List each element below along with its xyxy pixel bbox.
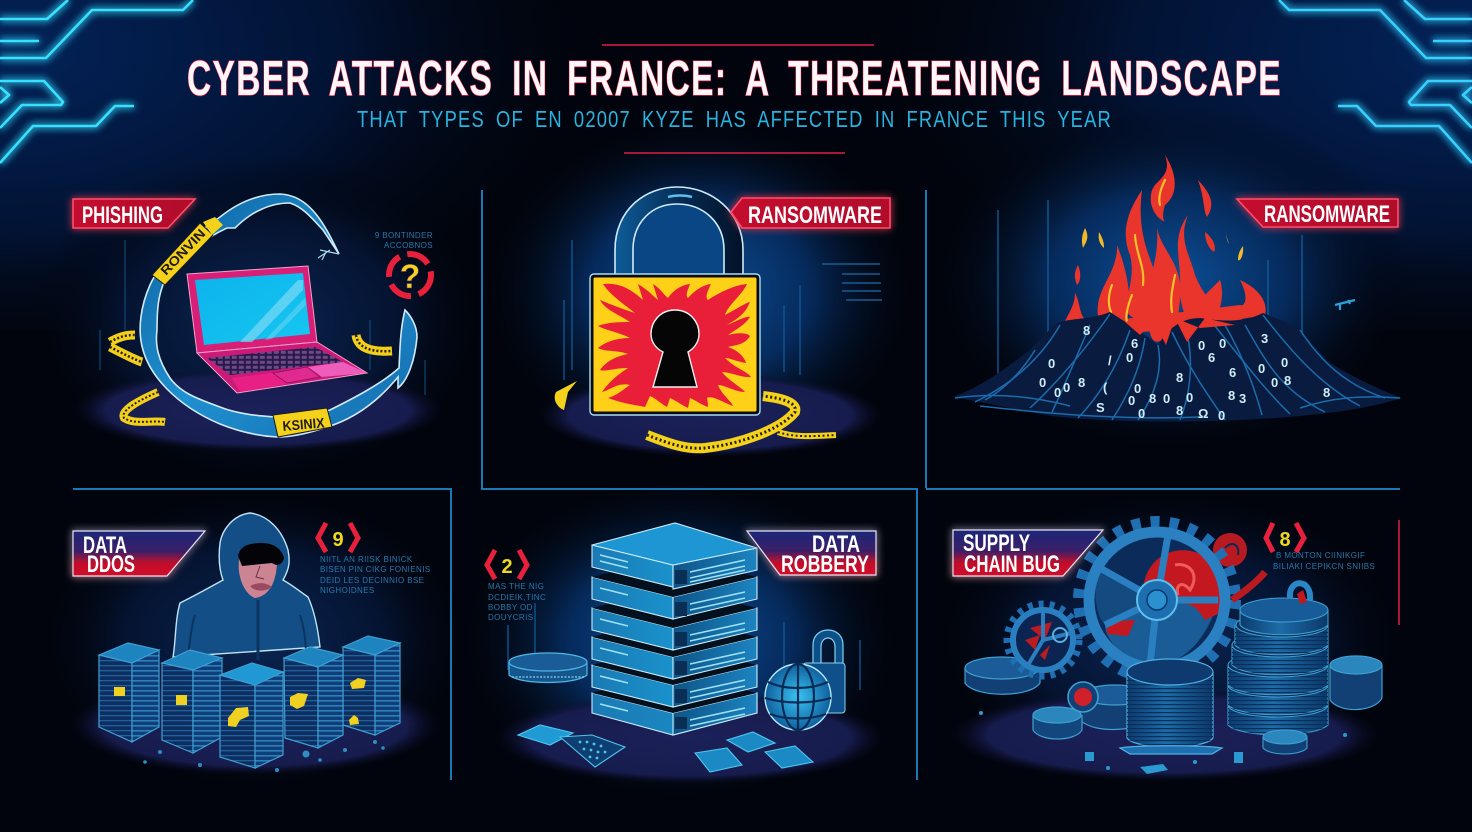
red button [1068,682,1098,712]
binary digits: 3 [1261,331,1268,346]
panel: ransomware fire [953,155,1402,423]
subtitle: THAT TYPES OF EN 02007 KYZE HAS AFFECTED IN FRANCE THIS YEAR [357,106,1112,132]
sparks [1082,228,1243,260]
large gear [1079,522,1235,678]
caption: NIITL AN RIISK BINICK [320,555,413,564]
caption: NIGHOIDNES [320,586,375,595]
binary digits: 0 [1219,336,1226,351]
icon: laptop [187,266,367,393]
icon: keypad and cards [518,725,813,772]
malware marks [114,678,366,727]
caption [1273,551,1375,571]
small stacked disk [1263,730,1307,754]
label: data ddos: DDOS [87,551,135,578]
server racks [99,636,400,768]
binary digits: 0 [1198,338,1205,353]
device slots [675,570,687,729]
label: data robbery: DATA [812,531,860,558]
small gear [1007,604,1079,676]
flames [1062,155,1266,342]
label: data robbery [747,531,876,633]
caption: BISEN PIN CIKG FONIENIS [320,565,431,574]
debris drone [1335,300,1355,310]
icon: padlock and globe [765,630,845,730]
yellow tape on hook [152,217,332,437]
binary digits: 0 [1039,375,1046,390]
binary digits: 0 [1054,385,1061,400]
binary digits: S [1096,400,1105,415]
icon: question mark [389,254,431,296]
label: supply chain bug: SUPPLY [963,530,1030,557]
label: data ddos: DATA [83,532,127,559]
binary digits: 8 [1078,375,1085,390]
binary digits: 3 [1239,391,1246,406]
debris [979,711,1347,774]
label: phishing [73,199,195,297]
background bars [822,264,882,300]
caption: MAS THE NIG [488,582,544,591]
caption [375,231,433,250]
caution ribbons [110,335,392,422]
panel: supply chain bug [950,520,1399,781]
binary digits: Ω [1198,406,1208,421]
binary digits [1039,323,1330,423]
binary digits: 0 [1271,375,1278,390]
red side rule [1398,520,1400,625]
panel: data robbery [487,523,885,784]
binary digits: 8 [1176,403,1183,418]
icon: warning chevrons: 2 [501,556,513,578]
icon: padlock [590,187,760,415]
yellow tape on hook: RONVIN [157,226,208,278]
lock bits on stack [1297,590,1307,604]
binary digits: 8 [1228,388,1235,403]
binary digits: 0 [1163,391,1170,406]
binary digits: 0 [1218,408,1225,423]
binary digits: 0 [1186,390,1193,405]
binary digits: 8 [1149,391,1156,406]
icon: warning chevrons [1266,523,1304,552]
circuit traces: top right [1279,0,1472,163]
label: ransomware: RANSOMWARE [1264,201,1390,228]
caption: BILIAKI CEPIKCN SNIIBS [1273,562,1375,571]
flat disks [965,656,1382,739]
label: ransomware: RANSOMWARE [748,202,882,229]
binary digits: 0 [1063,380,1070,395]
panel: phishing [73,194,443,452]
coil spool [1120,659,1222,754]
caption [488,582,546,622]
flame tips over pile [1125,315,1235,345]
panel dividers [73,190,1400,780]
icon: fish hook [140,194,417,437]
panel: ddos [70,513,440,775]
caption: 9 BONTINDER [375,231,433,240]
keyhole [651,310,699,387]
binary digits: 0 [1281,355,1288,370]
binary digits: 0 [1128,393,1135,408]
icon: warning chevrons: 8 [1279,529,1291,551]
caution ribbon [555,381,836,448]
binary digits: 0 [1126,350,1133,365]
label: supply chain bug [953,530,1103,632]
scattered debris [143,740,385,772]
binary digits: 0 [1138,406,1145,421]
icon: warning chevrons [318,523,358,552]
cylinder stack [1228,583,1328,735]
caption: ACCOBNOS [384,241,433,250]
flame highlights [1109,180,1175,322]
label: ransomware [1237,199,1398,298]
hook barb wires [318,250,339,260]
binary digits: 6 [1208,350,1215,365]
caption: BOBBY OD [488,603,533,612]
binary digits: 0 [1048,356,1055,371]
icon: hooded hacker [173,513,320,660]
icon: coin disk [509,653,587,682]
binary digits: ( [1103,380,1108,395]
binary digits: 6 [1229,365,1236,380]
binary digits: 8 [1083,323,1090,338]
circuit traces: top left [0,0,193,163]
icon: warning chevrons [487,550,527,579]
caption: DEID LES DECINNIO BSE [320,576,424,585]
label: phishing: PHISHING [82,202,163,229]
data pile [953,312,1402,422]
caption: B MONTON CIINIKGIF [1276,551,1365,560]
binary digits: 0 [1258,361,1265,376]
rule above title [602,44,874,46]
binary digits: 0 [1134,381,1141,396]
icon: warning chevrons: 9 [332,529,344,551]
binary digits: 8 [1176,370,1183,385]
icon: question mark: ? [400,258,420,296]
binary digits: 8 [1323,385,1330,400]
label: ransomware [731,198,890,300]
binary digits: 6 [1131,336,1138,351]
label: data ddos [73,531,205,632]
panel: ransomware lock [538,187,890,457]
burst [598,284,751,408]
caption: DOUYCRIS [488,613,533,622]
icon: server stack [592,523,757,735]
red dome [1213,533,1247,567]
server vents [600,555,745,726]
label: supply chain bug: CHAIN BUG [964,551,1060,578]
caption: DCDIEIK,TINC [488,593,546,602]
binary digits: 8 [1284,373,1291,388]
caption [320,555,431,595]
binary digits: / [1108,353,1112,368]
yellow tape on hook: KSINIX [282,414,326,434]
red pipes [1232,572,1265,600]
label: data robbery: ROBBERY [781,551,869,578]
rule below subtitle [624,152,845,154]
